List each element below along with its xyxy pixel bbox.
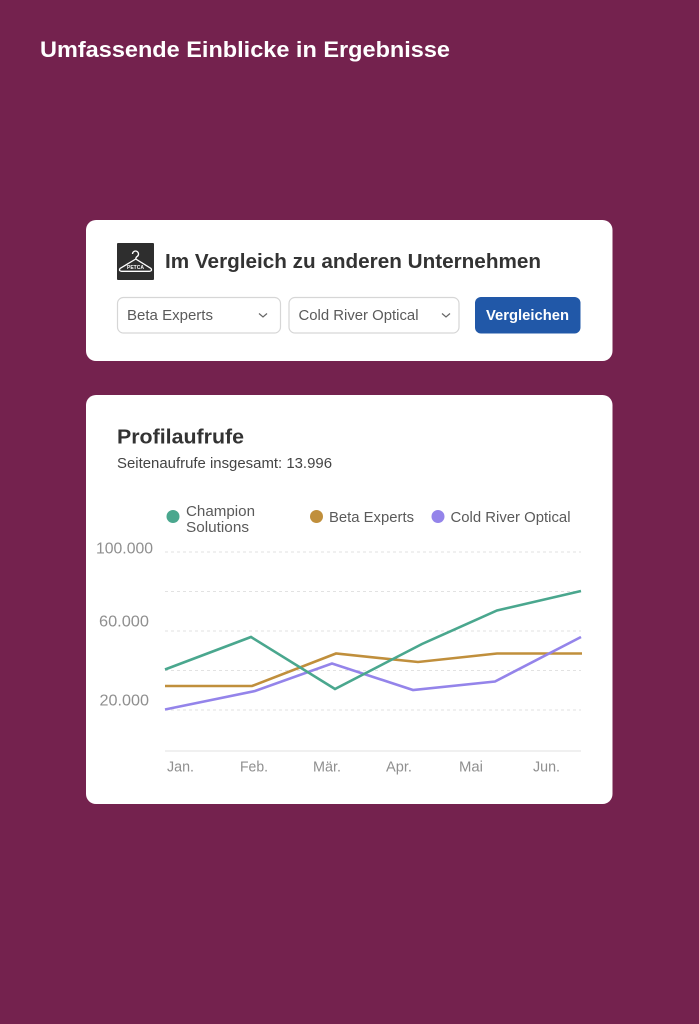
y axis labels [96, 540, 153, 710]
legend: Cold River Optical [450, 509, 570, 526]
dropdown: Cold River Optical: Cold River Optical [298, 307, 418, 324]
dropdown: Cold River Optical [289, 298, 459, 333]
x axis labels: Jan. [167, 760, 194, 776]
x axis labels: Mai [459, 760, 483, 776]
line chart [96, 540, 582, 776]
legend: Beta Experts [329, 509, 414, 526]
series: Champion Solutions [165, 591, 581, 689]
panel: profile views [86, 395, 612, 804]
legend: Champion [186, 503, 255, 520]
x axis labels [167, 760, 560, 776]
x axis labels: Feb. [240, 760, 268, 776]
dropdown: Beta Experts [118, 298, 280, 333]
icon: hanger logo [117, 243, 154, 280]
text: total page views: Seitenaufrufe insgesamt: 13.996 [117, 456, 332, 472]
x axis labels: Apr. [386, 760, 412, 776]
panel: company comparison [86, 220, 612, 361]
dropdown: Beta Experts: Beta Experts [127, 307, 213, 324]
series: Cold River Optical [165, 637, 581, 710]
heading: Profilaufrufe: Profilaufrufe [117, 426, 244, 448]
x axis labels: Mär. [313, 760, 341, 776]
y axis labels: 20.000 [100, 692, 149, 710]
y axis labels: 100.000 [96, 540, 153, 558]
series: Beta Experts [165, 654, 582, 686]
title: Umfassende Einblicke in Ergebnisse [40, 37, 450, 62]
legend: Solutions [186, 519, 249, 536]
heading: comparison: Im Vergleich zu anderen Unternehmen [165, 250, 541, 273]
x axis labels: Jun. [533, 760, 560, 776]
icon: hanger logo: PETCA [127, 265, 144, 271]
button: Vergleichen: Vergleichen [486, 307, 569, 324]
button: Vergleichen [475, 297, 580, 334]
legend [166, 503, 570, 536]
y axis labels: 60.000 [99, 614, 149, 630]
